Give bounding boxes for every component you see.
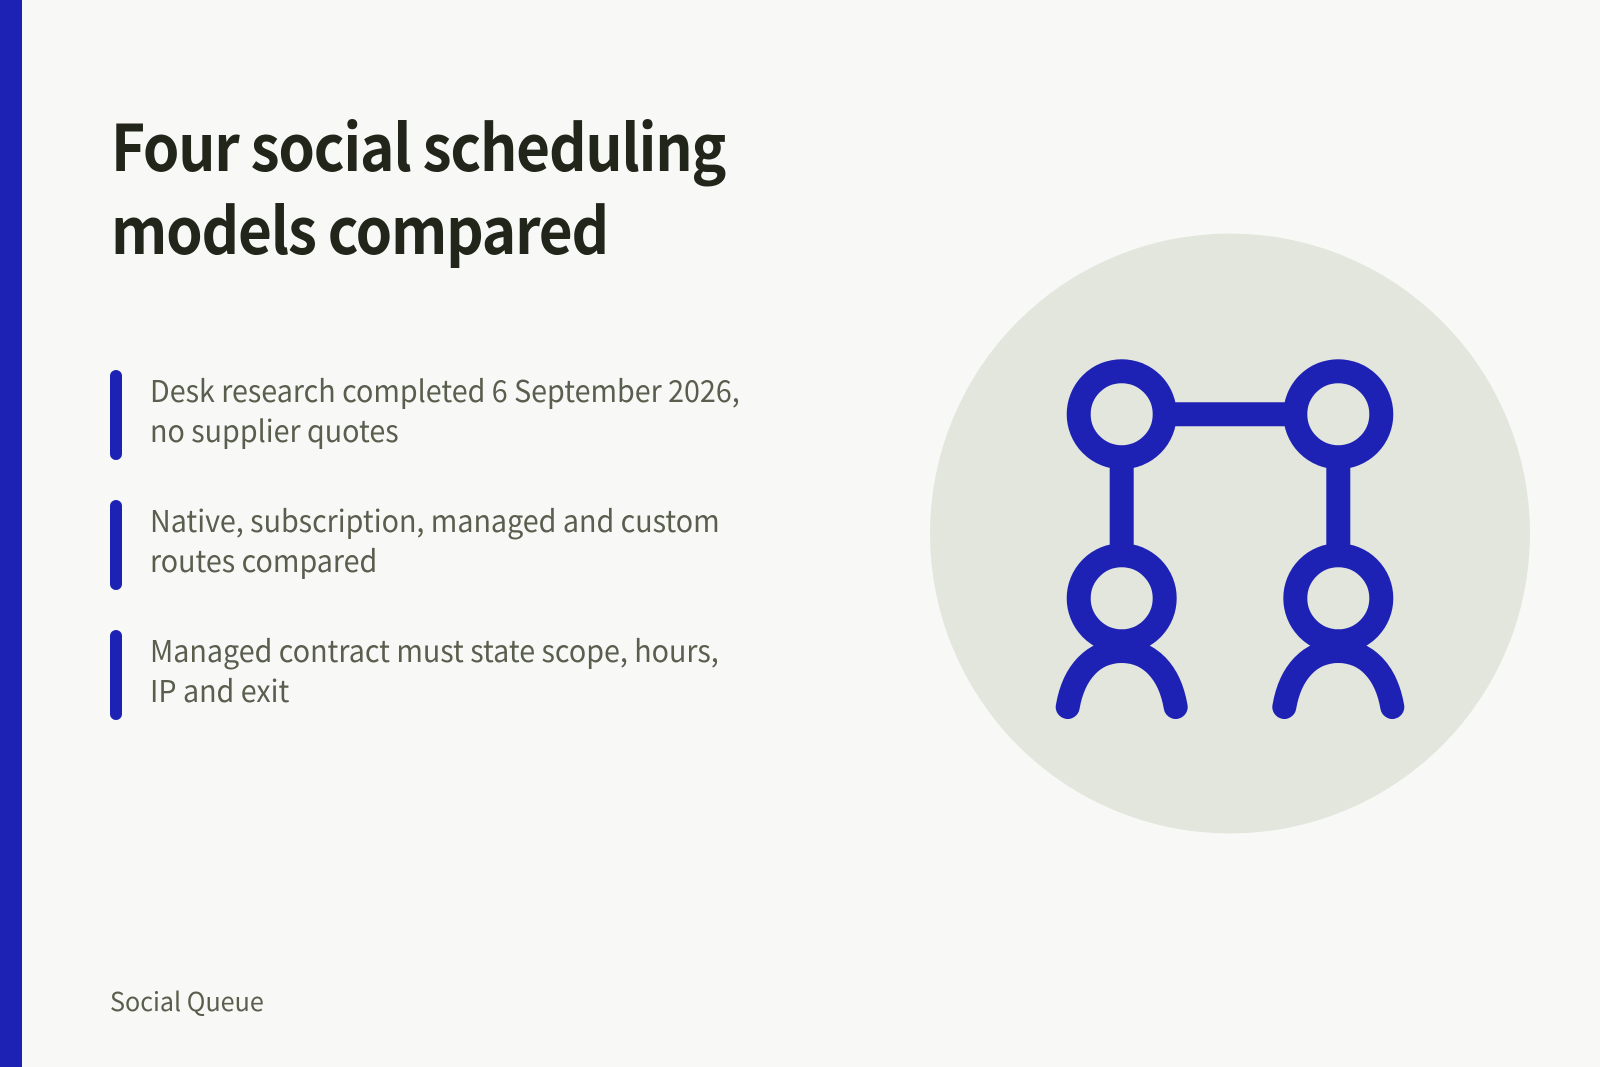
- bullet: routes compared: routes compared: [150, 537, 377, 581]
- bullet: routes compared: Native, subscription, managed and custom: [150, 497, 720, 541]
- bullet: managed contract: [110, 627, 719, 720]
- left accent band: [0, 0, 22, 1067]
- bullet: managed contract: Managed contract must state scope, hours,: [150, 627, 719, 671]
- title: [111, 98, 726, 272]
- footer brand: Social Queue: [110, 982, 264, 1019]
- title: Four social scheduling: [111, 98, 725, 190]
- title: models compared: [111, 180, 608, 272]
- bullet: desk research: [110, 367, 740, 460]
- bullet list: [110, 367, 740, 720]
- bullet: desk research: no supplier quotes: [150, 407, 399, 451]
- bullet: managed contract: IP and exit: [150, 667, 289, 711]
- bullet: desk research: Desk research completed 6 September 2026,: [150, 367, 740, 411]
- bullet: routes compared: [110, 497, 720, 590]
